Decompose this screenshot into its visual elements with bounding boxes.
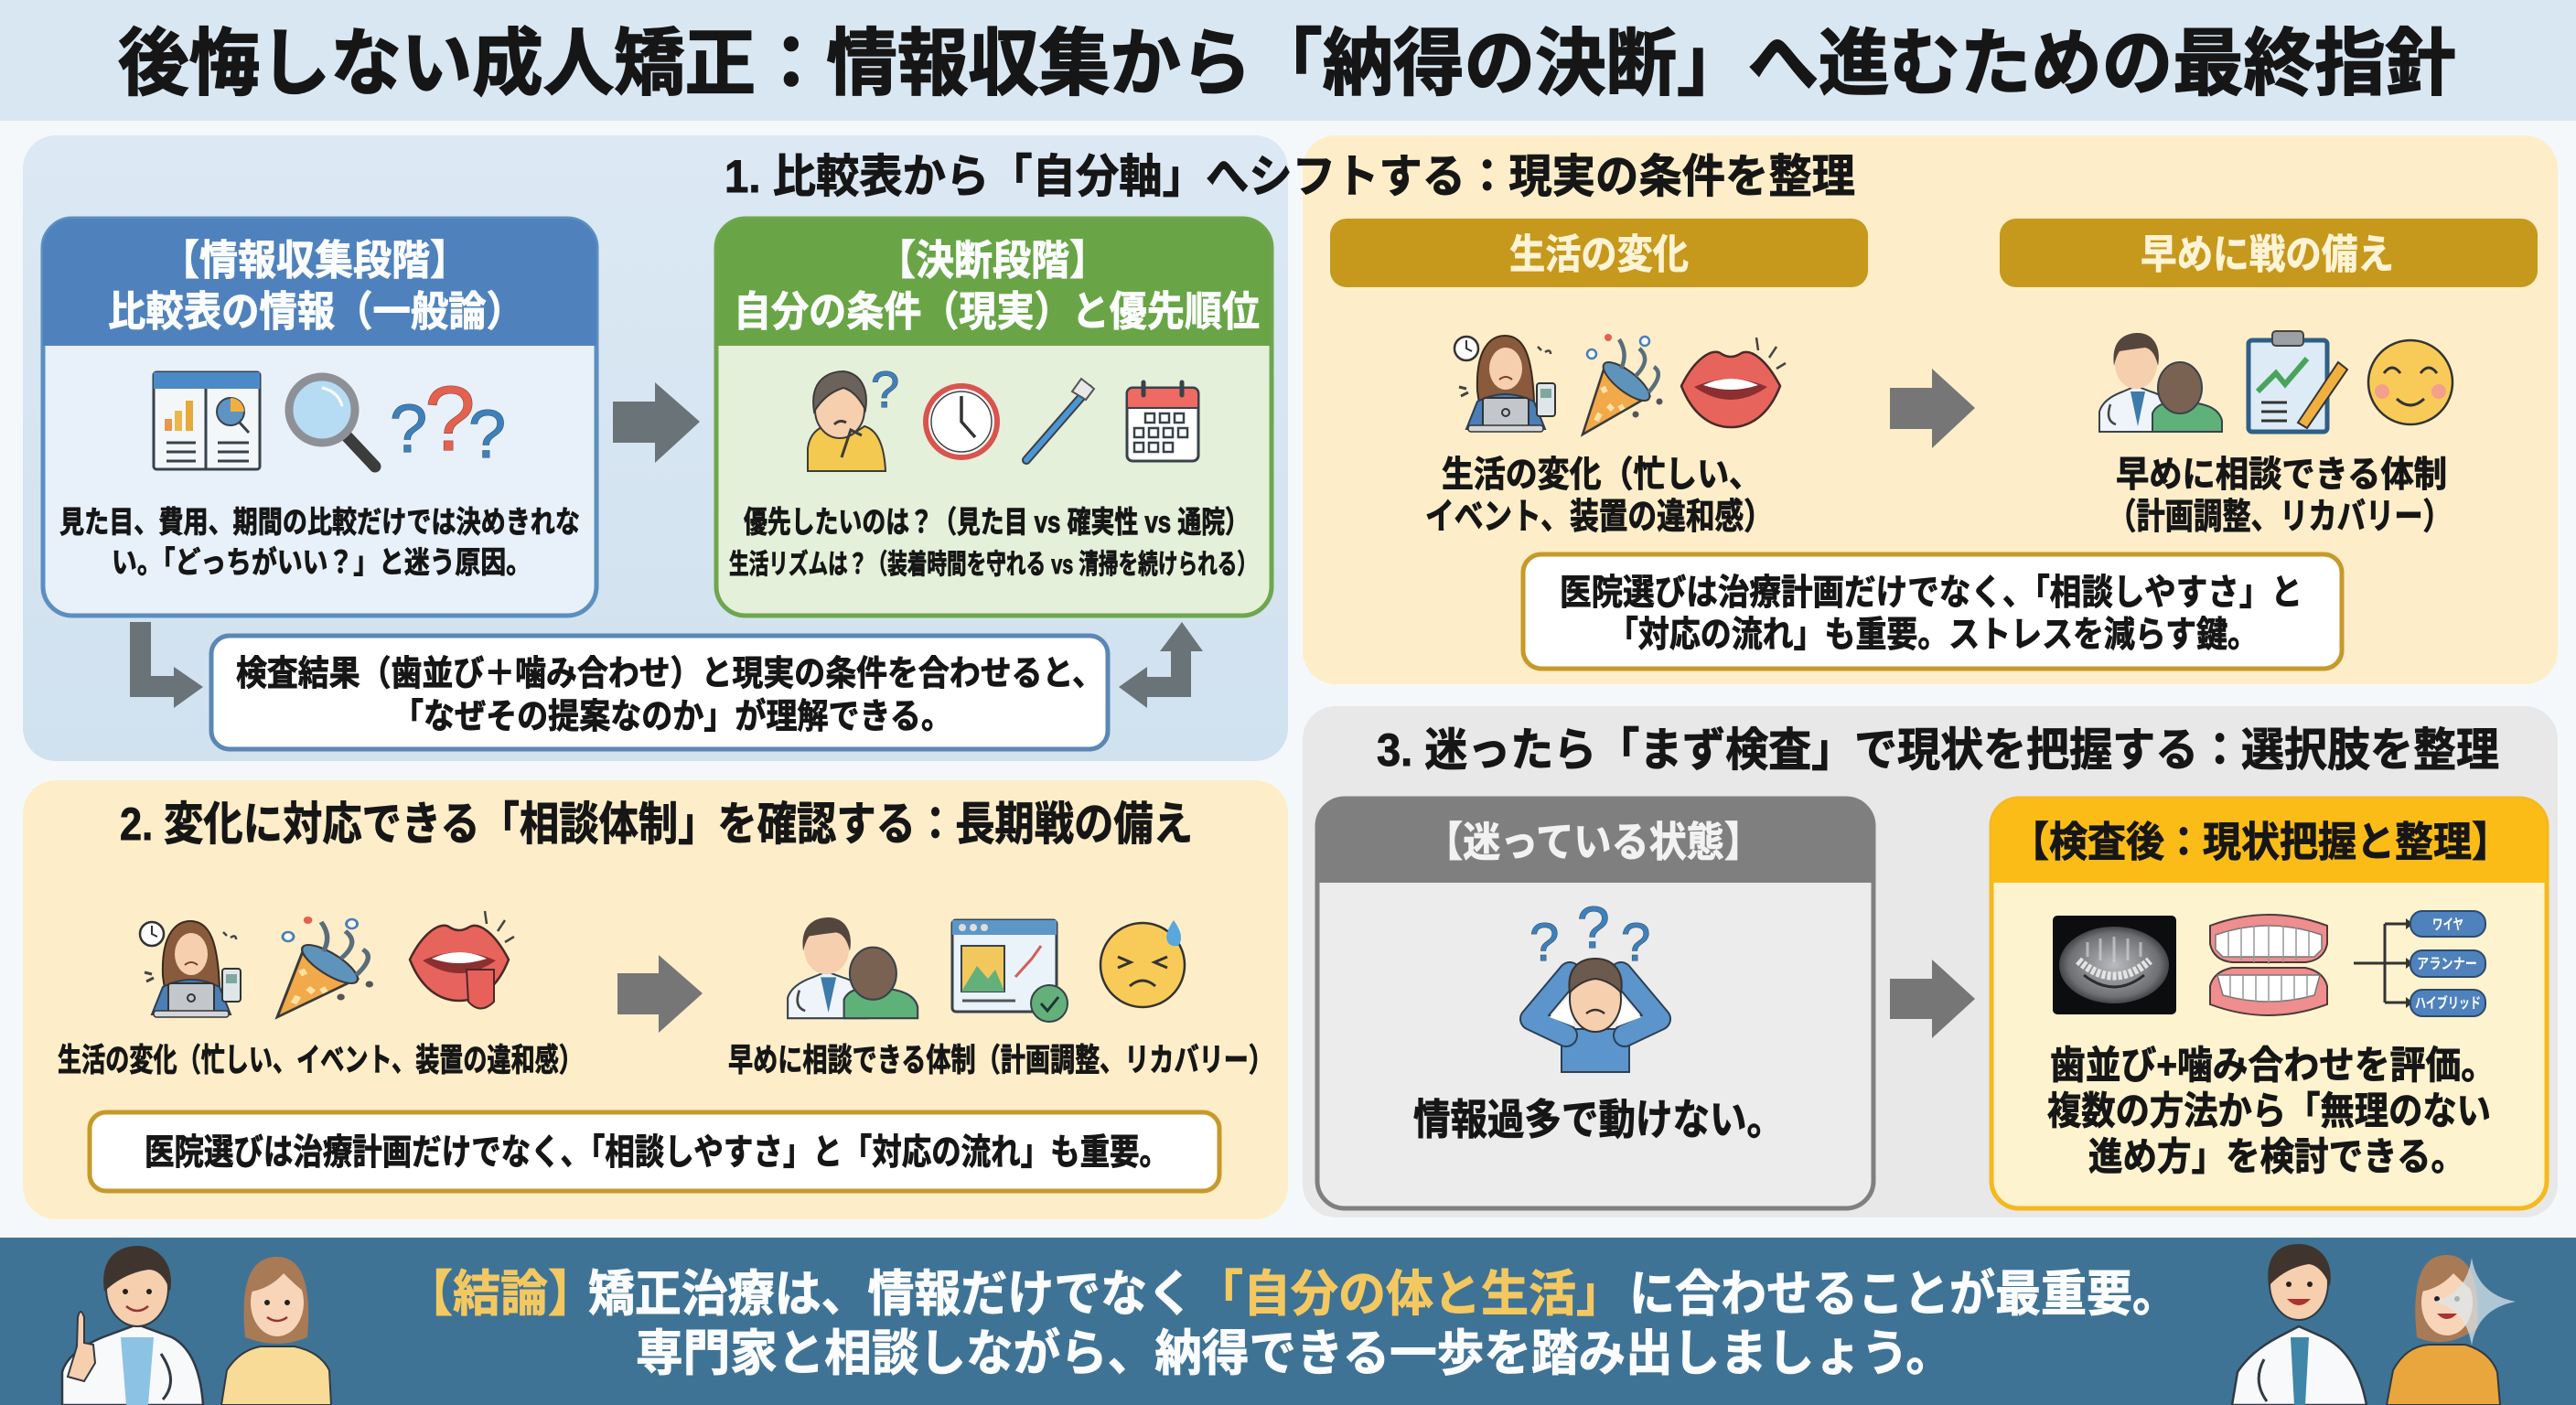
icon: lips with tongue — [410, 911, 514, 1008]
text: conclusion: 専門家と相談しながら、納得できる一歩を踏み出しましょう。 — [636, 1326, 1953, 1381]
card: undecided state — [1317, 799, 1873, 1208]
icon: question marks: ? — [468, 396, 506, 472]
icon: confused person — [1530, 895, 1659, 1072]
text: after exam: 進め方」を検討できる。 — [2088, 1135, 2465, 1178]
person: left doctor — [62, 1246, 203, 1405]
sparkle watermark — [2433, 1258, 2516, 1346]
footer: conclusion — [0, 1238, 2576, 1405]
callout: exam results — [211, 636, 1108, 749]
person: right woman — [2387, 1255, 2500, 1405]
panel 3: exam first — [1303, 706, 2558, 1217]
card: undecided state: 【迷っている状態】 — [1425, 819, 1762, 865]
icon: doctor and patient — [2099, 333, 2222, 432]
icon: clock — [926, 386, 997, 457]
callout: clinic selection: 医院選びは治療計画だけでなく、「相談しやすさ」と「対応の流れ」も重要。 — [145, 1133, 1169, 1173]
card: decision stage: 自分の条件（現実）と優先順位 — [734, 288, 1260, 335]
icon: doctor and patient — [788, 917, 918, 1018]
icon: magnifier — [289, 377, 375, 467]
arrow: elbow from callout up — [1119, 622, 1203, 708]
text: after exam — [2047, 1044, 2496, 1178]
icon: lips — [1681, 338, 1786, 427]
card: information gathering: 【情報収集段階】 — [161, 237, 468, 284]
icon: thinking person: ? — [871, 360, 899, 418]
icon: worried face — [1100, 920, 1185, 1007]
text: early consultation: （計画調整、リカバリー） — [2108, 498, 2452, 537]
arrow — [617, 955, 703, 1033]
section 1 heading: 1. 比較表から「自分軸」へシフトする：現実の条件を整理 — [724, 151, 1855, 202]
title: 後悔しない成人矯正：情報収集から「納得の決断」へ進むための最終指針 — [118, 23, 2456, 104]
section 3 heading: 3. 迷ったら「まず検査」で現状を把握する：選択肢を整理 — [1377, 724, 2499, 776]
text: conclusion: 【結論】 — [405, 1267, 596, 1322]
icon: option tree: ハイブリッド — [2415, 994, 2481, 1012]
icon: confused person: ? — [1621, 913, 1650, 972]
text: conclusion: 矯正治療は、情報だけでなく — [588, 1267, 1194, 1322]
card body text — [59, 505, 580, 579]
arrow: elbow to callout — [130, 622, 203, 708]
icon: option tree: ワイヤ — [2432, 917, 2463, 933]
card: decision stage — [716, 219, 1272, 616]
card body text: 見た目、費用、期間の比較だけでは決めきれな — [59, 505, 580, 539]
icon: thinking person — [808, 360, 899, 471]
arrow: to decision — [613, 382, 700, 463]
text: after exam: 歯並び+噛み合わせを評価。 — [2050, 1044, 2496, 1087]
card: after exam — [1991, 799, 2547, 1208]
card body text — [729, 505, 1257, 580]
icon: toothbrush — [1026, 379, 1094, 460]
pill: early preparation: 早めに戦の備え — [2141, 232, 2394, 277]
icon: clipboard — [2249, 331, 2347, 432]
panel: life changes top right — [1303, 135, 2558, 684]
icon: party cone — [277, 917, 373, 1017]
card: after exam: 【検査後：現状把握と整理】 — [2011, 819, 2510, 865]
card: decision stage: 【決断段階】 — [877, 237, 1108, 284]
pill: early preparation — [2000, 219, 2538, 287]
callout: exam results: 検査結果（歯並び＋噛み合わせ）と現実の条件を合わせると、 — [236, 655, 1103, 693]
icon: question marks: ? — [424, 368, 476, 470]
text: conclusion: 「自分の体と生活」 — [1196, 1267, 1624, 1322]
callout: clinic selection — [1523, 554, 2342, 669]
text: conclusion: に合わせることが最重要。 — [1629, 1267, 2178, 1322]
icon: party cone — [1583, 334, 1663, 434]
text: life changes — [1425, 456, 1773, 537]
panel 1: comparison to own axis — [23, 135, 1288, 761]
icon: smiling face — [2368, 340, 2453, 424]
text: after exam: 複数の方法から「無理のない — [2047, 1089, 2491, 1132]
text: conclusion — [405, 1267, 2178, 1381]
callout: exam results: 「なぜその提案なのか」が理解できる。 — [392, 698, 952, 736]
icon: busy woman — [140, 921, 241, 1017]
icon: browser plan — [952, 920, 1068, 1022]
icon: x-ray — [2053, 916, 2176, 1014]
section 2 heading: 2. 変化に対応できる「相談体制」を確認する：長期戦の備え — [120, 799, 1193, 850]
icon: busy woman — [1454, 336, 1555, 432]
card body text: 生活リズムは？（装着時間を守れる vs 清掃を続けられる） — [729, 549, 1257, 580]
text: early consultation — [2108, 456, 2452, 537]
icon: option tree — [2354, 911, 2485, 1016]
icon: teeth model — [2210, 915, 2327, 1015]
pill: life changes: 生活の変化 — [1509, 232, 1689, 277]
text: too much info: 情報過多で動けない。 — [1413, 1096, 1784, 1143]
icon: confused person: ? — [1577, 895, 1610, 960]
text: life changes: 生活の変化（忙しい、 — [1442, 456, 1761, 495]
arrow — [1890, 960, 1975, 1038]
icon: comparison dashboard — [154, 372, 260, 469]
icon: confused person: ? — [1530, 913, 1559, 972]
callout: clinic selection: 「対応の流れ」も重要。ストレスを減らす鍵。 — [1607, 616, 2259, 655]
person: right doctor — [2232, 1244, 2367, 1405]
card body text: 優先したいのは？（見た目 vs 確実性 vs 通院） — [744, 505, 1249, 539]
card: information gathering: 比較表の情報（一般論） — [108, 288, 524, 335]
text: life changes: 生活の変化（忙しい、イベント、装置の違和感） — [58, 1043, 583, 1078]
callout: clinic selection — [90, 1112, 1219, 1191]
icon: calendar — [1127, 382, 1198, 461]
text: early consultation: 早めに相談できる体制（計画調整、リカバリー） — [728, 1043, 1273, 1078]
text: life changes: イベント、装置の違和感） — [1425, 498, 1773, 537]
card: information gathering — [43, 219, 596, 616]
header band with title — [0, 0, 2576, 121]
card body text: い。「どっちがいい？」と迷う原因。 — [112, 545, 531, 579]
person: left woman — [221, 1257, 331, 1405]
icon: question marks — [390, 368, 506, 472]
text: early consultation: 早めに相談できる体制 — [2116, 456, 2447, 495]
panel 2: consultation system — [23, 780, 1288, 1219]
callout: clinic selection: 医院選びは治療計画だけでなく、「相談しやすさ」と — [1560, 574, 2302, 613]
pill: life changes — [1330, 219, 1868, 287]
arrow — [1890, 369, 1975, 448]
icon: question marks: ? — [390, 391, 427, 467]
icon: option tree: アランナー — [2417, 957, 2477, 972]
